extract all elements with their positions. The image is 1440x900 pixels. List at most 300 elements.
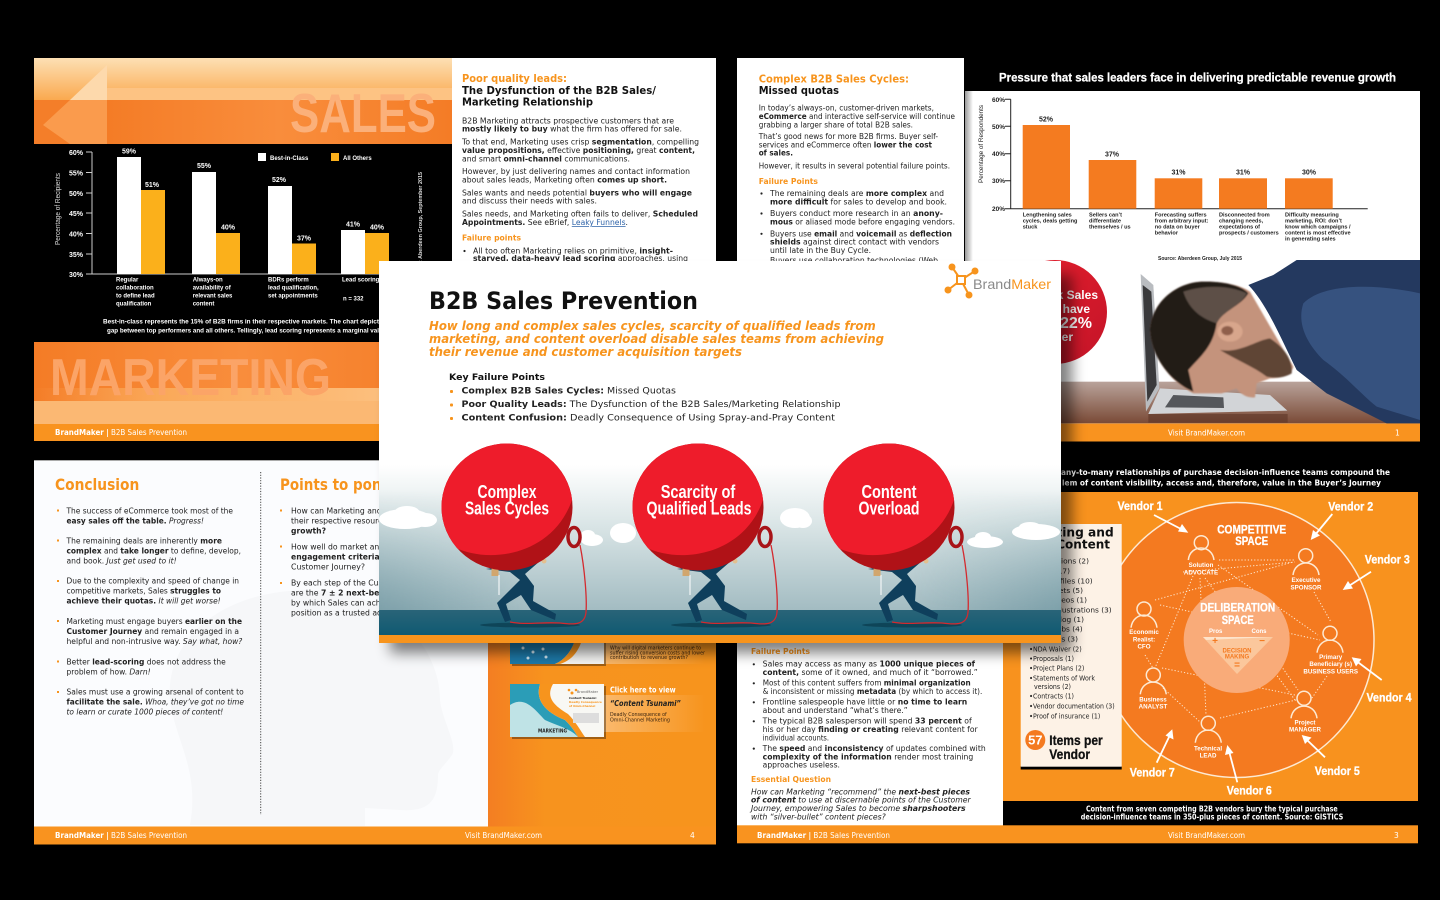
chart category labels: collaboration [116,286,154,292]
chart source: : Aberdeen Group, September 2015 [418,172,424,262]
chart values: 55% [197,163,212,170]
logo: brandmaker: BrandMaker [973,276,1051,292]
ponder bullets: position as a trusted advisor [291,609,401,618]
vendor labels: Vendor 3 [1365,552,1410,566]
column divider [260,472,262,815]
chart axis labels: 45% [69,211,84,218]
chart axis labels: 55% [69,170,84,178]
essential question: How can Marketing “recommend” the next-best pieces [751,787,971,796]
callout: red statistic circle: er [1062,330,1073,344]
chart values [122,148,385,242]
failure points list: Buyers use email and voicemail as deflection [770,229,952,238]
decision triangle: Pros [1209,629,1223,635]
decision triangle: − [1259,636,1265,647]
key failure points: Complex B2B Sales Cycles: Missed Quotas [462,387,676,397]
list items: Datasheets (5) [1028,586,1083,595]
footer: BrandMaker | B2B Sales Prevention [757,831,890,841]
person: solution advocate: ADVOCATE [1184,570,1218,577]
photo: man with head on laptop [1060,260,1420,423]
person: business analyst [1139,668,1168,711]
decision triangle: = [1234,660,1240,671]
list items: Videos (1) [1050,596,1087,605]
chart values: 59% [122,148,137,156]
chart category labels: cycles, deals getting [1023,219,1078,225]
panel: marketing banner [34,342,452,424]
failure points: starved, data-heavy lead scoring approaches, using [473,254,688,263]
chart axis labels: Percentage of Respondents [978,104,985,183]
chart category labels: Lead scoring [342,278,380,284]
person: technical lead: Technical [1194,745,1222,752]
conclusion bullets: Marketing must engage buyers earlier on the [66,617,242,626]
person: executive sponsor: Executive [1292,577,1321,584]
list items: • [1029,655,1033,663]
chart category labels: prospects / customers [1219,231,1279,237]
person: project manager [1289,691,1322,734]
body copy: services and eCommerce often lower the cost [759,140,932,149]
decision triangle: DECISION [1222,649,1252,655]
column: conclusion [55,475,244,717]
panel: poor quality leads text column [452,58,716,441]
key failure points: Key Failure Points [449,373,545,383]
body copy: To that end, Marketing uses crisp segmentation, compelling [461,138,699,147]
chart values: 30% [1302,170,1317,177]
chart axis labels: 30% [992,178,1005,185]
list items: versions (2) [1034,683,1071,691]
text: blue brief description: Why will digital marketers continue to [610,646,701,652]
callout: 57 items per vendor: Items per [1049,732,1103,748]
heading [462,72,657,109]
panel shadow [390,275,1072,653]
figure: complex sales cycles: Complex [478,482,536,502]
thumbnail: content tsunami cover [510,684,606,739]
chart category labels: Always-on [193,278,223,284]
conclusion bullets: Customer Journey and remain engaged in a [66,627,239,636]
footer: BrandMaker | B2B Sales Prevention [55,428,187,438]
panel: competitive space diagram [1003,492,1418,801]
footer: Visit BrandMaker.com [1168,831,1245,840]
heading [759,72,909,97]
caption: gistics source [1081,804,1343,822]
chart axis labels [978,97,1005,213]
chart values: 31% [1171,170,1186,177]
chart axis labels: 30% [69,272,84,279]
body copy [758,104,955,171]
arrow: vendor 1 [1154,515,1188,533]
chart category labels: to define lead [116,294,155,300]
body copy: That’s good news for more B2B firms. Buyer self- [758,132,938,141]
chart category labels: changing needs, [1219,219,1264,225]
spread: complex sales cycles page [737,58,1420,442]
list items: Project Plans (2) [1033,665,1085,673]
key failure points [449,373,841,423]
chart legend: Best-in-Class [270,156,309,162]
list items: Catalog (1) [1043,615,1084,624]
failure points: All too often Marketing relies on primitive, insight- [473,246,673,255]
figure: scarcity of qualified leads: Qualified Leads [646,499,752,519]
callout: 57 items per vendor [1025,730,1103,762]
subtitle: their revenue and customer acquisition targets [429,345,742,359]
body copy: B2B Marketing attracts prospective customers that are [462,116,674,125]
chart axis labels: 40% [992,151,1005,158]
body copy: However, by just delivering names and contact information [462,167,690,176]
person: primary beneficiary: Beneficiary (s) [1309,661,1352,668]
person: economic realist cfo: CFO [1137,644,1151,651]
arrow: vendor 7 [1157,729,1174,763]
person: project manager: Project [1295,720,1315,727]
panel: best-in-class bar chart [34,144,452,342]
key failure points: Poor Quality Leads: The Dysfunction of the B2B Sales/Marketing Relationship [462,400,841,410]
text: blue brief description [610,646,706,661]
chart values: 51% [145,182,160,189]
chart category labels [116,278,380,308]
text: content tsunami link: Omni-Channel Marketing [610,717,670,723]
arrow: vendor 3 [1343,572,1371,590]
chart caption: gap between top performers and all others. Tellingly, lead scoring represents a marginal val [107,329,379,335]
panel: sales arrow banner [34,58,452,144]
failure points list: individual accounts. [763,733,829,742]
text: content tsunami link: Deadly Consequence of [610,712,668,718]
figure: complex sales cycles [442,444,587,628]
heading: Marketing Relationship [462,96,593,109]
callout: red statistic circle: k Sales [1057,288,1098,302]
figure: content overload: Overload [858,499,920,519]
failure points list: until late in the Buy Cycle. [770,246,871,255]
list items: Proof of insurance (1) [1033,712,1101,720]
chart category labels: content is most effective [1285,231,1351,237]
ponder bullets: by which Sales can achieve [291,599,397,608]
chart legend [258,153,372,162]
conclusion bullets: achieve their quotas. It will get worse! [66,597,221,606]
list items: Emails (17) [1028,566,1070,575]
chart category labels: in generating sales [1285,237,1336,243]
list items: Presentations (2) [1026,556,1089,565]
thumbnail: content tsunami cover: Deadly Consequence [569,700,602,704]
person: technical lead [1194,716,1222,759]
chart category labels: Difficulty measuring [1285,213,1339,219]
chart title: Pressure that sales leaders face in delivering predictable revenue growth [999,71,1396,85]
deliberation space circle [1184,587,1290,693]
conclusion bullets: facilitate the sale. Whoa, they’ve got no time [66,698,244,707]
heading: Missed quotas [759,84,839,97]
person: executive sponsor: SPONSOR [1291,584,1322,591]
chart category labels: themselves / us [1089,225,1131,231]
body copy: eCommerce and interactive self-service will continue [759,112,955,121]
chart source: Source: Aberdeen Group, July 2015 [1158,256,1242,262]
chart bars [1023,125,1333,209]
ponder bullets: How well do market and [291,542,384,551]
list items: • [1029,674,1033,682]
arrow: vendor 5 [1302,735,1325,757]
laptop [1141,274,1288,423]
panel: marketing banner: MARKETING [50,349,331,407]
chart values: 52% [272,177,287,184]
ponder bullets: are the 7 ± 2 next-best [291,589,388,598]
footer: Visit BrandMaker.com [1168,428,1245,438]
chart category labels: lead qualification, [268,286,319,292]
caption: gistics source: decision-influence teams in 350-plus pieces of content. Source: GISTICS [1081,813,1343,822]
essential question: with “silver-bullet” content pieces? [751,812,886,821]
list items: PDF files (10) [1043,576,1093,585]
list items: • [1029,665,1033,673]
heading: The Dysfunction of the B2B Sales/ [462,84,657,97]
list items: Web tabs (4) [1035,625,1083,634]
text: content tsunami link [610,685,681,723]
desk [1060,382,1420,423]
person: primary beneficiary [1303,626,1358,675]
person: economic realist cfo [1129,602,1159,651]
chart axis labels: Percentage of Recipients [55,173,62,245]
vendor labels: Vendor 5 [1315,764,1360,778]
space labels: SPACE [1235,534,1268,548]
failure points list [751,647,986,770]
footer: 3 [1394,831,1399,840]
conclusion bullets: easy sales off the table. Progress! [66,516,204,525]
arrow: vendor 2 [1311,514,1332,540]
person: solution advocate: Solution [1189,562,1214,569]
footer: 1 [1395,428,1400,438]
chart category labels: content [193,302,214,308]
vendor labels: Vendor 2 [1328,500,1373,514]
ponder bullets: How can Marketing and Sales [291,506,405,515]
list items: Diagrams / Illustrations (3) [1013,605,1112,614]
subtitle: How long and complex sales cycles, scarcity of qualified leads from [429,319,876,333]
chart legend: All Others [343,156,372,162]
chart category labels: from arbitrary input: [1155,219,1209,225]
callout: red statistic circle [1003,260,1107,364]
chart category labels: relevant sales [193,294,233,300]
callout: 57 items per vendor: 57 [1028,732,1043,748]
failure points list: Failure Points [751,647,810,656]
subtitle [429,319,884,359]
callout: red statistic circle: have [1063,302,1090,316]
ponder bullets: growth? [291,526,326,535]
failure points list: The typical B2B salesperson will spend 33 percent of [762,717,972,726]
arrow: vendor 6 [1225,745,1237,782]
chart values: 52% [1039,116,1054,123]
body copy: and smart omni-channel communications. [462,154,630,163]
text: blue brief description: contribution to revenue growth? [610,655,688,661]
conclusion bullets: helpful and non-intrusive way. Say what, how? [66,637,242,646]
failure points [462,234,688,263]
chart category labels: BDRs perform [268,278,309,284]
failure points list: The remaining deals are more complex and [769,189,944,198]
failure points list: & inconsistent or missing metadata (by which to access it). [763,687,982,696]
chart category labels: expectations of [1219,225,1260,231]
chart values [1039,116,1317,177]
space labels: DELIBERATION [1200,601,1275,615]
callout: 57 items per vendor: Vendor [1049,746,1090,762]
panel: marketing and sales content list [1013,524,1122,770]
chart values: 41% [346,222,361,228]
clouds [379,506,1060,548]
person: solution advocate [1184,536,1218,577]
competitive space circle [1099,502,1374,778]
callout: red statistic circle: 22% [1060,315,1092,332]
list heading: Marketing and [1014,526,1114,540]
body copy [461,116,699,227]
conclusion bullets: Due to the complexity and speed of change in [66,577,239,586]
footer [737,424,1420,442]
list items: Vendor documentation (3) [1033,702,1115,710]
vendor labels: Vendor 7 [1130,766,1175,780]
failure points list: content, some of it owned, and much of it “borrowed.” [763,668,978,677]
chart caption: Best-in-class represents the 15% of B2B firms in their respective markets. The chart depict [103,320,379,326]
spread: content overload page [737,461,1418,843]
figure: complex sales cycles: Sales Cycles [465,499,549,519]
background scene [379,465,1061,643]
person: business analyst: Business [1139,696,1167,703]
panel: sales arrow banner: SALES [290,82,436,144]
body copy: mostly likely to buy what the firm has offered for sale. [462,125,682,134]
failure points list [759,177,955,265]
conclusion bullets: Better lead-scoring does not address the [66,657,226,666]
panel: content overload text column [737,461,1003,826]
list items: • [1029,702,1033,710]
body copy: In today’s always-on, customer-driven markets, [759,104,934,113]
body copy: grabbing a larger share of total B2B sales. [759,120,913,129]
conclusion bullets: competitive markets, Sales struggles to [66,587,221,596]
body copy: value propositions, effective positioning, great content, [462,146,695,155]
panel: complex sales cycles text column [737,58,964,441]
conclusion bullets: to learn or curate 1000 pieces of content! [66,708,223,717]
space labels [1200,522,1286,627]
chart category labels: no data on buyer [1155,225,1201,231]
panel: many-to-many heading: any-to-many relationships of purchase decision-influence teams compound the [1061,468,1391,477]
conclusion bullets: The remaining deals are inherently more [66,536,222,545]
footer [34,826,716,844]
chart axis [86,152,440,274]
chart category labels: qualification [116,302,152,308]
vendor labels [1118,499,1412,797]
ponder bullets: engagement criteria [291,552,380,561]
panel: many-to-many heading [1061,468,1391,487]
chart category labels: Regular [116,278,139,284]
list items: NDA Waiver (2) [1033,645,1082,653]
spread: sales and marketing chart page [34,58,716,441]
vendor labels: Vendor 6 [1227,783,1272,797]
vendor labels: Vendor 4 [1366,691,1412,705]
thumbnail: blue brief cover [510,640,606,666]
decision triangle: Cons [1252,629,1267,635]
heading: Complex B2B Sales Cycles: [759,72,909,85]
panel: many-to-many heading: lem of content visibility, access and, therefore, value in the Buyer’s Journey [1062,478,1382,487]
body copy: of sales. [759,149,793,158]
chart axis labels [55,150,84,279]
footer: 4 [690,831,695,840]
column: points to ponder [280,475,407,618]
person: executive sponsor [1291,549,1322,591]
body copy: about sales leads, Marketing often comes up short. [462,175,667,184]
failure points list: more difficult for sales to develop and book. [770,197,947,206]
essential question [749,775,972,821]
thumbnail: content tsunami cover: Content Tsunami: [569,696,597,700]
text: blue brief description: suffer rising conversion costs and lower [610,650,706,656]
column: points to ponder: Points to ponder [280,475,407,494]
person: project manager: MANAGER [1289,727,1322,734]
chart category labels: Sellers can’t [1089,213,1122,219]
chart axis labels: 60% [69,150,84,157]
failure points list: Sales may access as many as 1000 unique pieces of [763,660,976,669]
footer [737,825,1418,843]
failure points list: mous or aliased mode before engaging vendors. [770,217,955,226]
space labels: COMPETITIVE [1217,522,1286,536]
chart category labels: Lengthening sales [1023,213,1072,219]
arrow: vendor 4 [1352,657,1382,680]
person: primary beneficiary: BUSINESS USERS [1303,668,1358,675]
chart axis labels: 50% [69,191,84,198]
panel: conclusion background [34,460,716,827]
chart category labels: marketing, ROI: don’t [1285,219,1342,225]
chart category labels: Disconnected from [1219,213,1270,219]
essential question: Essential Question [751,775,831,784]
chart category labels: differentiate [1089,219,1121,225]
chart axis labels: 40% [69,232,84,238]
chart category labels: availability of [193,286,232,292]
head [1150,282,1293,397]
failure points list: about and understand “what’s there.” [763,706,908,715]
failure points list: Most of this content suffers from minimal organization [763,679,971,688]
failure points: Failure points [462,234,521,243]
ponder bullets: By each step of the Customer [291,579,406,588]
body copy: Appointments. See eBrief, Leaky Funnels. [462,218,628,227]
conclusion bullets: complex and take longer to define, develop, [66,546,241,555]
key failure points: Content Confusion: Deadly Consequence of Using Spray-and-Pray Content [462,413,836,423]
person: primary beneficiary: Primary [1319,654,1343,661]
panel: b2b sales prevention cover [379,261,1061,643]
figure: content overload: Content [862,482,917,502]
footer: BrandMaker | B2B Sales Prevention [55,831,187,841]
heading: Poor quality leads: [462,72,567,85]
chart category labels [1023,213,1351,243]
list items: • [1029,712,1033,720]
column: conclusion: Conclusion [55,475,139,494]
conclusion bullets: The success of eCommerce took most of the [66,506,233,515]
ponder bullets: their respective resources [291,516,391,525]
person: economic realist cfo: Economic [1129,629,1159,636]
vendor labels: Vendor 1 [1118,499,1163,513]
body copy: Sales needs, and Marketing often fails to deliver, Scheduled [462,210,698,219]
logo: brandmaker [946,264,1051,298]
ponder bullets: Customer Journey? [291,562,365,571]
list heading: Sales Content [1016,538,1110,552]
person: business analyst: ANALYST [1139,704,1168,711]
chart axis labels: 35% [69,252,84,259]
chart values: 40% [370,224,385,232]
chart values: 31% [1236,170,1251,177]
figure: scarcity of qualified leads [632,444,778,628]
conclusion bullets [57,506,244,717]
chart values: 37% [1105,152,1120,159]
chart values: 37% [297,236,312,242]
failure points list: Buyers use collaboration technologies (Web [770,256,938,265]
chart axis labels: 60% [992,97,1005,104]
text: content tsunami link: Click here to view [610,685,676,694]
failure points list: Failure Points [759,177,818,186]
failure points list: Buyers conduct more research in an anony- [770,209,943,218]
list items: • [1029,693,1033,701]
failure points list: his or her day finding or creating relevant content for [763,725,979,734]
chart category labels: Forecasting suffers [1155,213,1207,219]
space labels: SPACE [1222,613,1254,627]
shirt [1248,260,1420,423]
chart axis [1005,99,1368,209]
ponder bullets [280,506,406,618]
list items: • [1029,645,1033,653]
chart category labels: behavior [1155,231,1179,237]
chart category labels: know which campaigns / [1285,225,1351,231]
failure points list: complexity of the information render most training [763,752,974,761]
thumbnail: content tsunami cover: BrandMaker [577,690,599,694]
